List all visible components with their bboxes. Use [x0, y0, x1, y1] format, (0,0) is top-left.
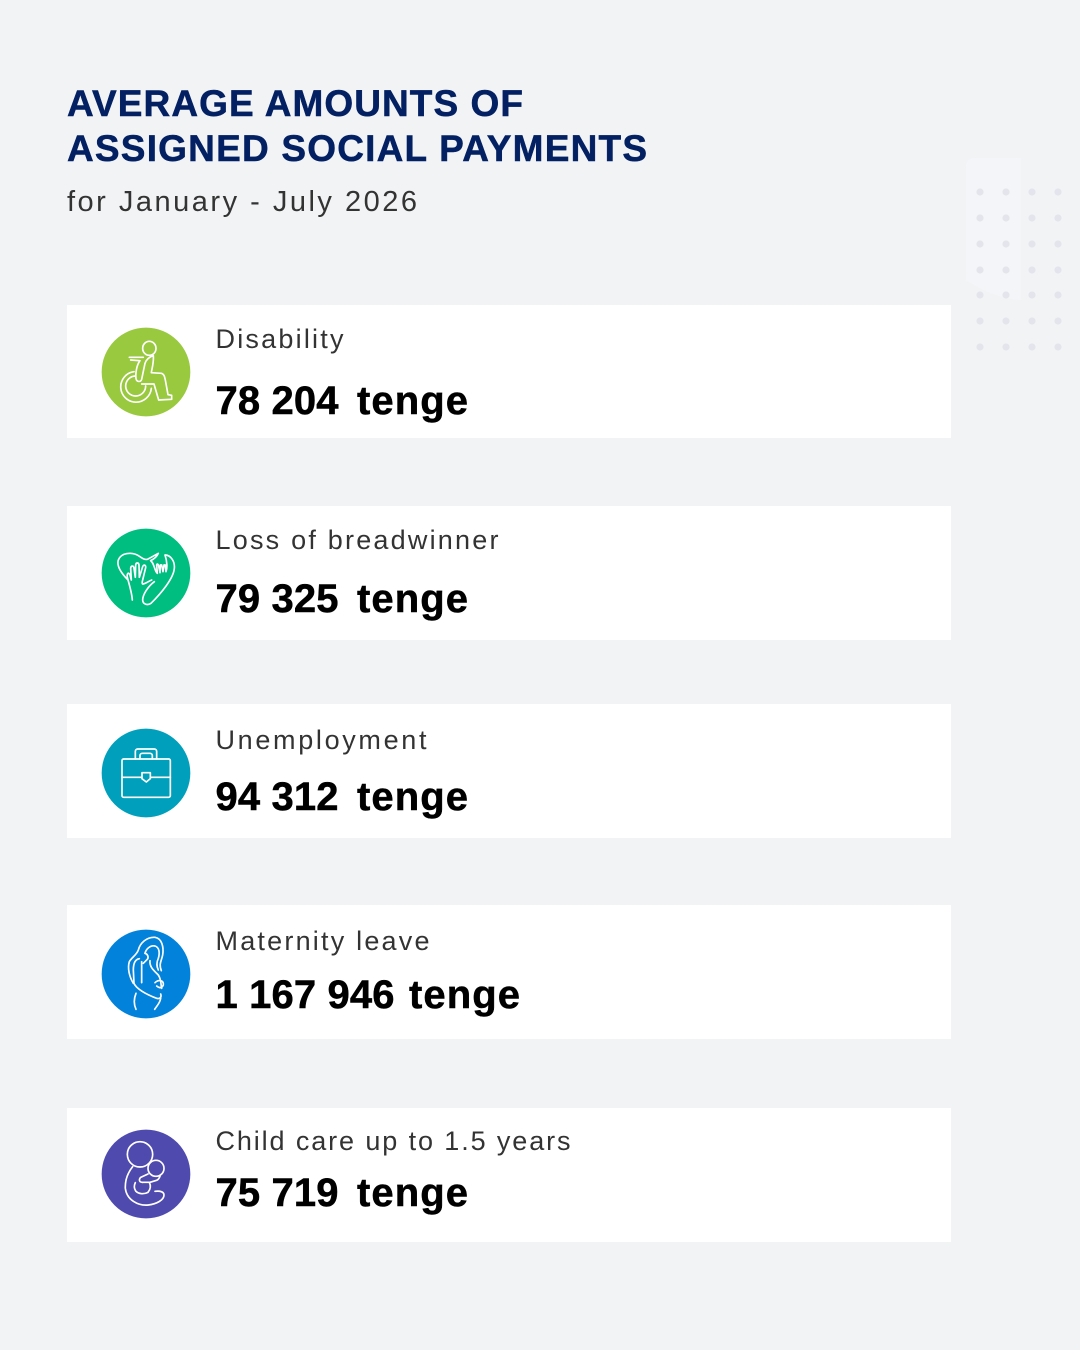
panel: disability — [67, 305, 951, 438]
label: disability: Disability — [216, 324, 344, 354]
panel: loss of breadwinner — [67, 506, 951, 640]
amount: maternity leave: tenge — [409, 973, 520, 1017]
amount: child care — [216, 1171, 468, 1215]
icon: briefcase — [102, 729, 190, 817]
icon: hands in heart — [102, 529, 190, 617]
amount: loss of breadwinner — [216, 577, 468, 621]
icon: mother and child — [102, 1130, 190, 1218]
label: child care: Child care up to 1.5 years — [216, 1126, 570, 1156]
label: unemployment: Unemployment — [216, 725, 427, 755]
amount: unemployment — [216, 775, 468, 819]
amount: child care: 75 719 — [216, 1171, 338, 1215]
amount: disability — [216, 379, 468, 423]
title: ASSIGNED SOCIAL PAYMENTS — [67, 128, 647, 169]
amount: loss of breadwinner: 79 325 — [216, 577, 338, 621]
amount: loss of breadwinner: tenge — [357, 577, 468, 621]
panel: maternity leave — [67, 905, 951, 1039]
title: AVERAGE AMOUNTS OF — [67, 83, 523, 124]
panel: child care — [67, 1108, 951, 1242]
amount: maternity leave — [216, 973, 520, 1017]
amount: maternity leave: 1 167 946 — [216, 973, 394, 1017]
amount: disability: tenge — [357, 379, 468, 423]
amount: unemployment: 94 312 — [216, 775, 338, 819]
label: loss of breadwinner: Loss of breadwinner — [216, 525, 498, 555]
amount: child care: tenge — [357, 1171, 468, 1215]
icon: pregnant woman — [102, 930, 190, 1018]
amount: disability: 78 204 — [216, 379, 339, 423]
decorative dot pattern — [966, 158, 1062, 351]
title — [67, 83, 647, 169]
label: maternity leave: Maternity leave — [216, 926, 430, 956]
subtitle: for January - July 2026 — [67, 186, 417, 218]
panel: unemployment — [67, 704, 951, 838]
icon: wheelchair — [102, 328, 190, 416]
amount: unemployment: tenge — [357, 775, 468, 819]
